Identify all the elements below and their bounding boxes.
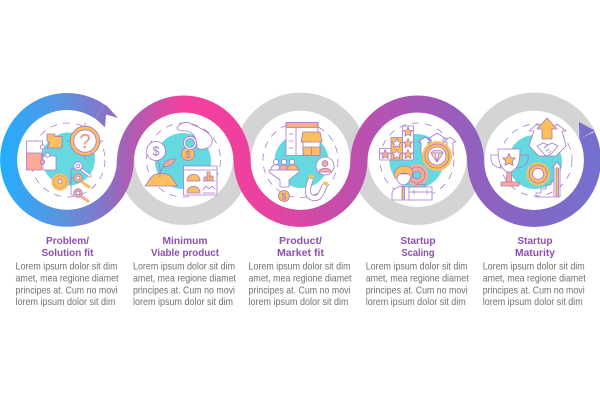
text block: problem solution fit: Lorem ipsum dolor sit dim [16,260,118,272]
text block: startup scaling [366,235,469,308]
text block: startup scaling: lorem ipsum dolor sit dim [366,296,466,308]
text block: minimum viable product: Lorem ipsum dolor sit dim [133,260,235,272]
text block: product market fit: Product/ [279,235,322,247]
text block: startup scaling: Lorem ipsum dolor sit dim [366,260,468,272]
text block: minimum viable product: Viable product [151,247,219,259]
user badge [316,157,334,175]
text block: startup scaling: principes at. Cum no movi [366,284,468,296]
text block: product market fit: Market fit [277,247,324,259]
text block: startup maturity: Maturity [515,247,555,259]
puzzle pieces [26,134,62,170]
icon: startup maturity [491,118,572,197]
dashboard [184,166,217,195]
text block: problem solution fit: Solution fit [42,247,94,259]
text block: startup scaling: Scaling [402,247,434,259]
text block: startup scaling: Startup [400,235,436,247]
text block: minimum viable product: lorem ipsum dolor sit dim [133,296,233,308]
text block: startup scaling: amet, mea regione diamet [366,272,469,284]
stairs and rising arrow [536,162,561,197]
icon: startup scaling [380,123,456,200]
funnel with people and coin: $ [281,192,287,202]
text block: minimum viable product: principes at. Cum no movi [133,284,235,296]
text block: startup maturity: lorem ipsum dolor sit dim [483,296,583,308]
businessman and briefcase [392,166,432,200]
text block: problem solution fit [16,235,119,308]
star rating bars [380,126,414,160]
gradient ribbon with arrow ends [9,101,595,218]
browser and shop [286,122,322,156]
text block: product market fit: Lorem ipsum dolor sit dim [248,260,351,272]
text block: problem solution fit: lorem ipsum dolor sit dim [16,296,116,308]
text block: product market fit: amet, mea regione diamet [248,272,352,284]
text block: minimum viable product: amet, mea regione diamet [133,272,236,284]
trophy [491,149,528,186]
icon: problem solution fit [26,123,105,201]
text block: product market fit: principes at. Cum no movi [248,284,350,296]
text block: startup maturity: Lorem ipsum dolor sit dim [483,260,585,272]
text block: product market fit [248,235,352,308]
text block: problem solution fit: principes at. Cum no movi [16,284,118,296]
question mark badge: ? [79,131,91,153]
sprout with dollar: $ [153,144,160,158]
magnet [308,175,326,198]
icon: product market fit [263,122,338,202]
gear and keys [52,162,90,201]
gear [528,164,548,184]
text block: minimum viable product [133,235,236,308]
growth arrows and diamond gear [418,133,456,170]
hand with coin: $ [185,150,191,161]
text block: product market fit: lorem ipsum dolor sit dim [248,296,349,308]
text block: problem solution fit: Problem/ [46,235,89,247]
text block: minimum viable product: Minimum [162,235,208,247]
text block: problem solution fit: amet, mea regione diamet [16,272,119,284]
grey background rings [125,102,587,216]
icon: minimum viable product [145,122,220,197]
text block: startup maturity: Startup [518,235,552,247]
text block: startup maturity [483,235,586,308]
arrows and handshake [529,118,566,156]
